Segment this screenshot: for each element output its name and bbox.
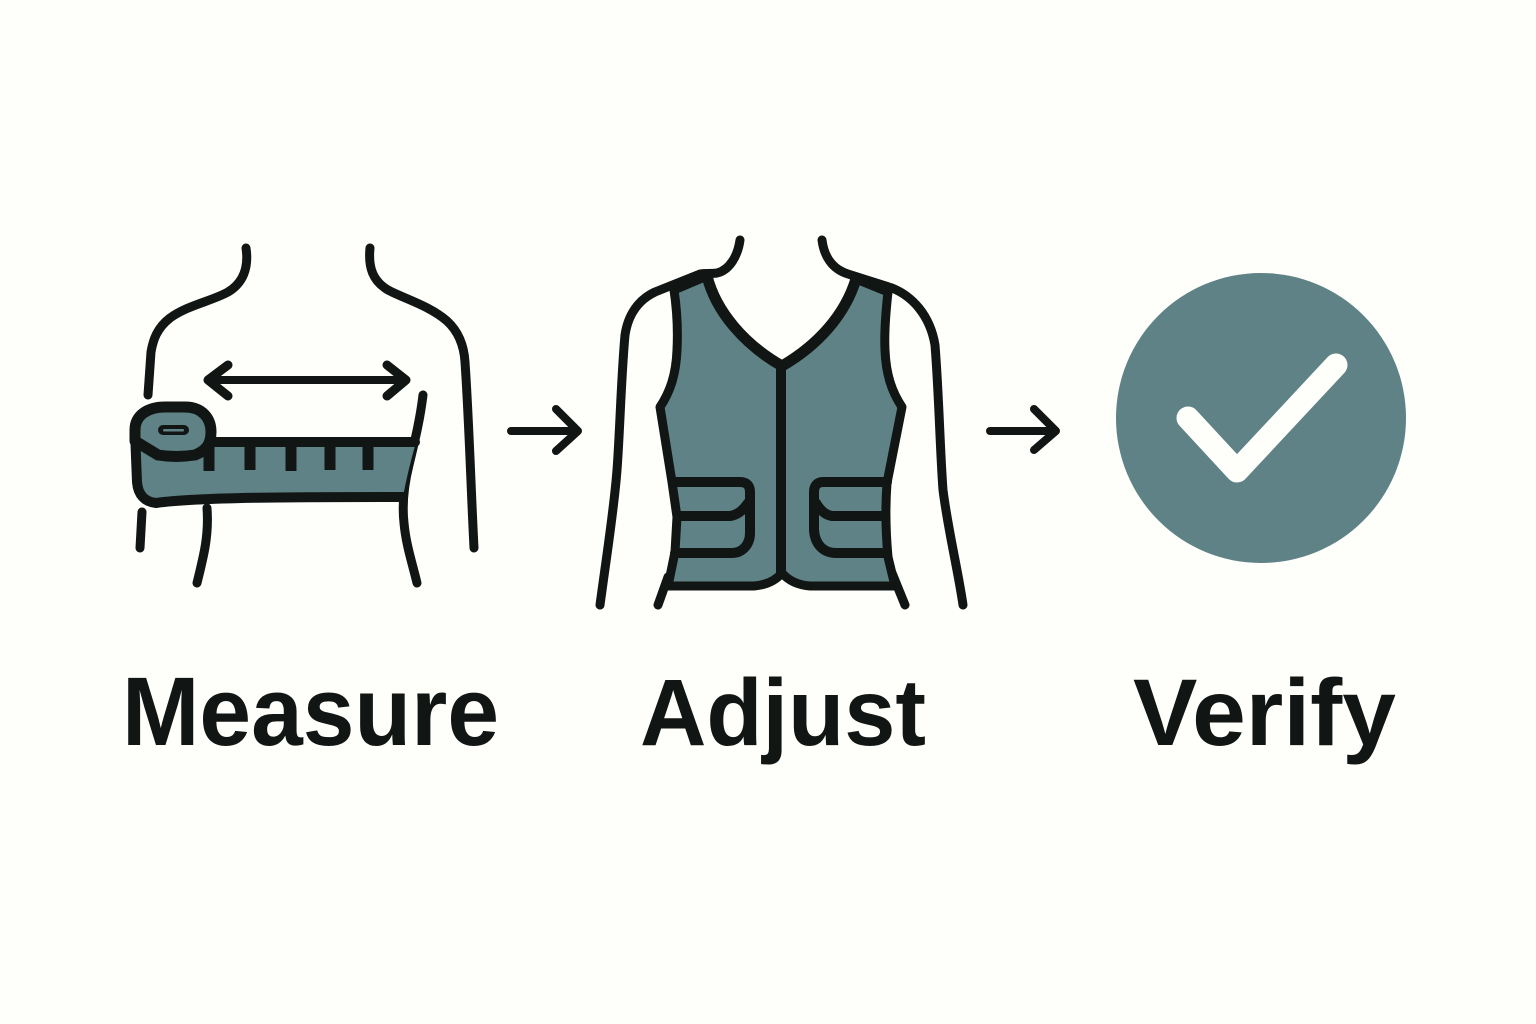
arrow: measure to adjust [511,409,578,451]
torso outlines [600,240,740,605]
icon: vest on torso [600,240,963,605]
vest body [660,276,902,586]
double-headed arrow [208,365,406,396]
tape roll [135,407,211,456]
left pocket [673,482,750,553]
label: Measure: Measure [122,657,499,766]
zipper [776,367,786,573]
icon: check circle [1116,273,1406,563]
tape strip [135,430,416,503]
neckline [707,276,856,366]
label: Verify: Verify [1133,660,1396,766]
arrow: adjust to verify [990,409,1056,450]
label: Adjust: Adjust [640,660,926,766]
check mark [1188,365,1336,471]
icon: measuring tape around chest [135,248,474,583]
right pocket [814,482,887,553]
